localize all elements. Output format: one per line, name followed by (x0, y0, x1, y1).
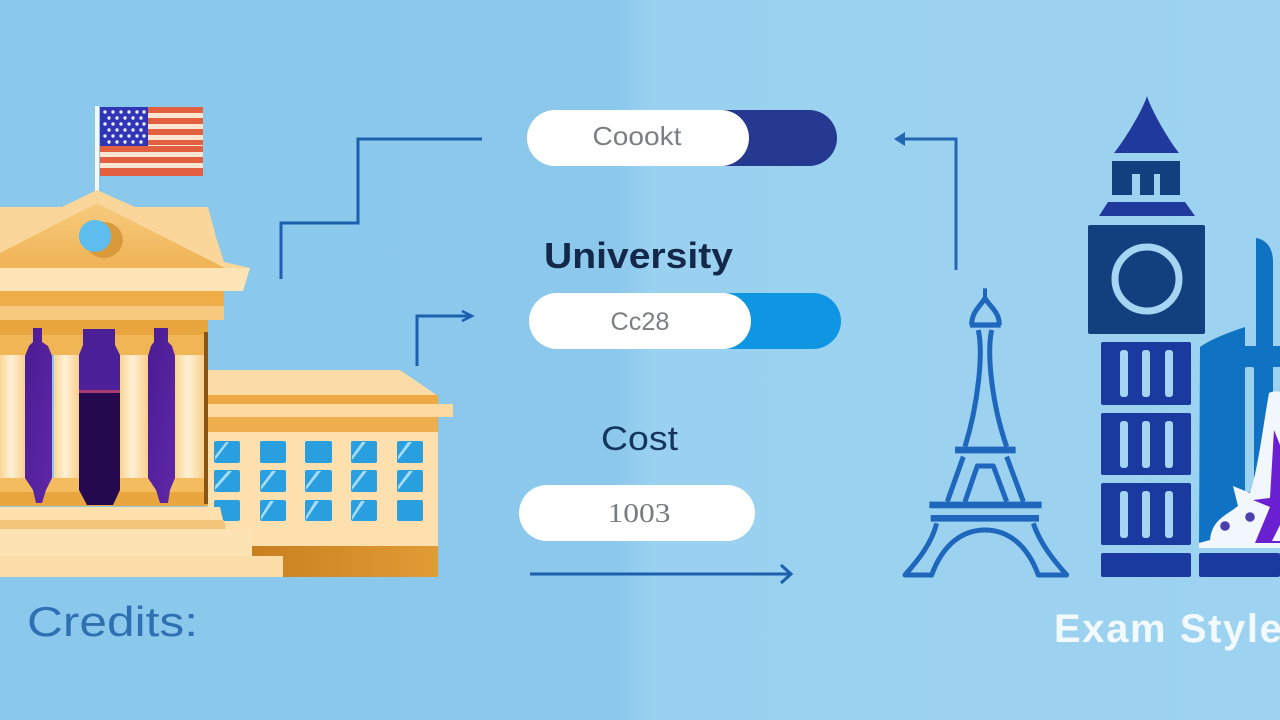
icon: American flag (95, 106, 203, 191)
heading: Cost: Cost (601, 420, 679, 458)
roof and pediment (0, 190, 250, 335)
purple curtains and doorway (25, 328, 175, 505)
steps (0, 507, 283, 577)
pill value: 1003 (608, 498, 670, 528)
pill label: Coookt (592, 121, 682, 151)
label: Credits: Credits: (27, 598, 198, 645)
arrow: bottom horizontal (530, 565, 791, 583)
icon: Big Ben clock tower (1088, 96, 1205, 577)
pill label: Cc28 (610, 308, 670, 336)
arrow: stepped connector from university (281, 139, 482, 279)
arrow: short connector to cost pill (417, 311, 472, 366)
pill: top (527, 110, 837, 166)
pill: bottom (519, 485, 755, 541)
icon: Eiffel Tower (905, 288, 1067, 575)
label: Exam Style: Exam Style (1054, 607, 1280, 651)
icon: city skyline with star (1199, 238, 1280, 577)
icon: university building (0, 106, 453, 577)
pill: middle (529, 293, 841, 349)
arrow: return connector from landmarks (894, 132, 956, 270)
side wing (207, 370, 453, 577)
columns (0, 332, 208, 506)
heading: University: University (544, 235, 733, 276)
